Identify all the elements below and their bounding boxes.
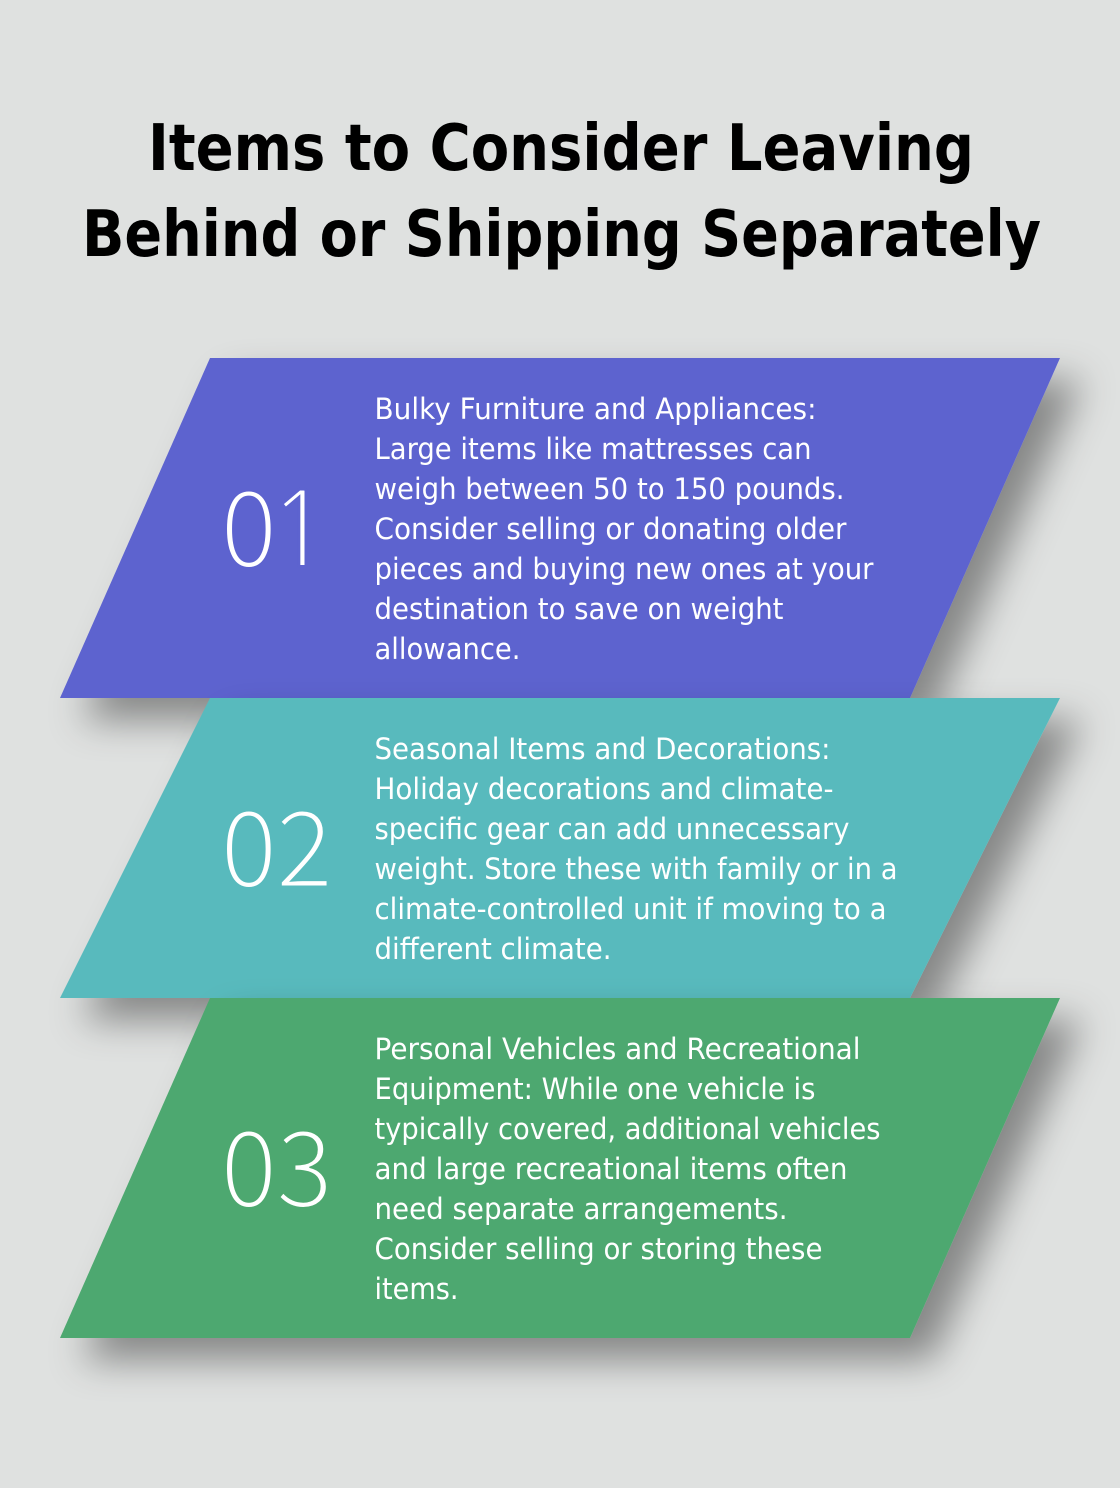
title: Items to Consider Leaving	[148, 112, 974, 186]
text block 02: different climate.	[374, 932, 612, 966]
title	[82, 112, 1041, 272]
text block 02: specific gear can add unnecessary	[374, 812, 850, 846]
text block 01: allowance.	[374, 632, 520, 666]
number 03: 03	[221, 1085, 332, 1236]
text block 03: Personal Vehicles and Recreational	[374, 1032, 860, 1066]
text block 03: need separate arrangements.	[374, 1192, 788, 1226]
panel shape 03	[60, 998, 1060, 1338]
text block 01	[374, 392, 874, 666]
text block 01: Consider selling or donating older	[374, 512, 847, 546]
number 02: 02	[221, 765, 332, 916]
text block 03: Equipment: While one vehicle is	[374, 1072, 816, 1106]
text block 02: Seasonal Items and Decorations:	[374, 732, 830, 766]
text block 01: pieces and buying new ones at your	[374, 552, 874, 586]
panel shape 02	[60, 698, 1060, 998]
text block 02: weight. Store these with family or in a	[374, 852, 898, 886]
text block 03	[374, 1032, 880, 1306]
text block 02	[374, 732, 898, 966]
text block 02: Holiday decorations and climate-	[374, 772, 834, 806]
panel shape 01	[60, 358, 1060, 698]
number 01: 01	[221, 445, 331, 596]
panel: step 03 personal vehicles	[60, 998, 1060, 1338]
text block 01: Large items like mattresses can	[374, 432, 812, 466]
text block 01: Bulky Furniture and Appliances:	[374, 392, 816, 426]
panel: step 02 seasonal items	[60, 698, 1060, 998]
text block 03: items.	[374, 1272, 458, 1306]
text block 03: Consider selling or storing these	[374, 1232, 822, 1266]
text block 01: weigh between 50 to 150 pounds.	[374, 472, 844, 506]
text block 03: typically covered, additional vehicles	[374, 1112, 880, 1146]
text block 02: climate-controlled unit if moving to a	[374, 892, 886, 926]
text block 03: and large recreational items often	[374, 1152, 848, 1186]
text block 01: destination to save on weight	[374, 592, 784, 626]
panel: step 01 bulky furniture	[60, 358, 1060, 698]
